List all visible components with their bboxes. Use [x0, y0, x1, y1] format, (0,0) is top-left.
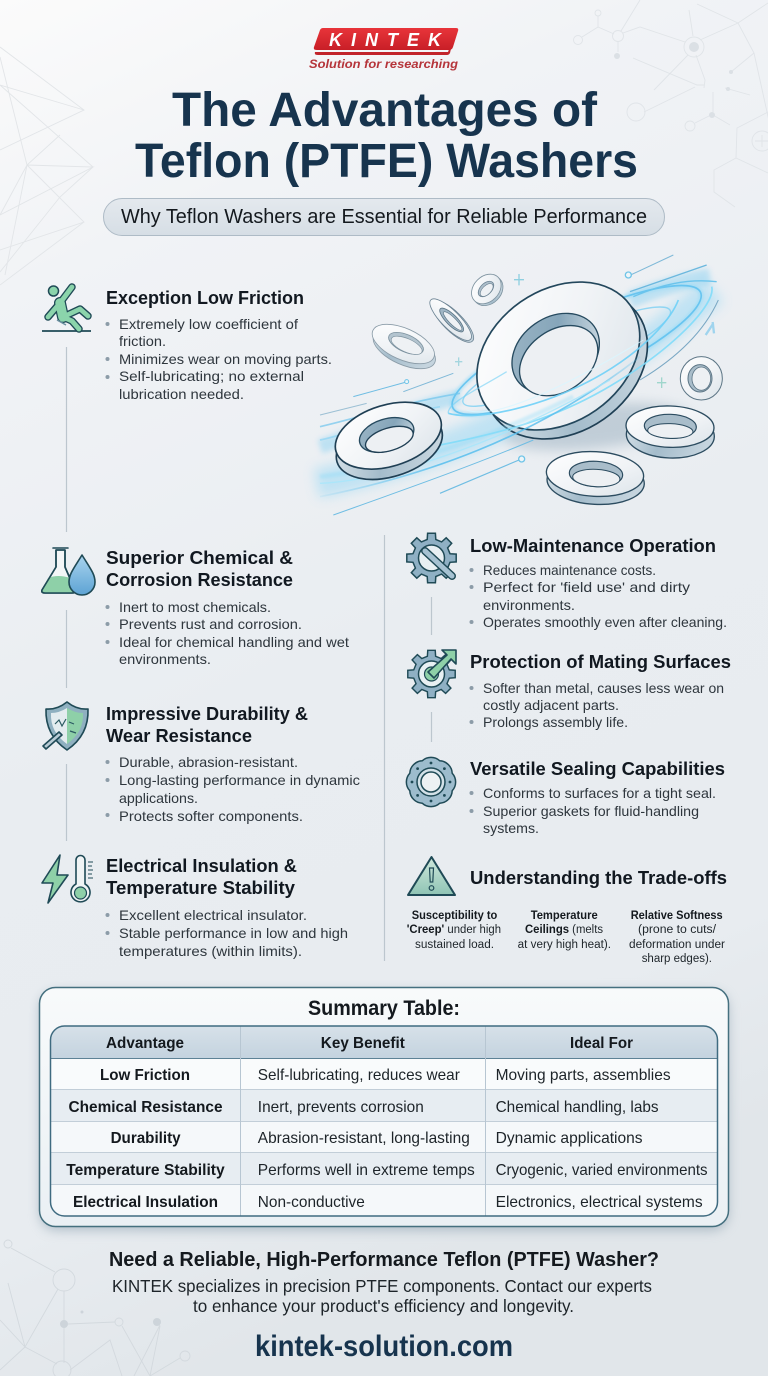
bullets: low friction: Extremely low coefficient of [119, 316, 298, 332]
bullets: low maintenance [470, 562, 727, 630]
table row: low friction: Moving parts, assemblies [496, 1067, 671, 1084]
heading: sealing: Versatile Sealing Capabilities [470, 759, 725, 779]
washer: narrow tilted [425, 294, 479, 348]
text: temperature ceilings: Ceilings (melts [525, 924, 603, 936]
background pattern: top right molecule network [574, 0, 768, 207]
heading: chemical resistance: Corrosion Resistance [106, 570, 293, 590]
heading: trade-offs: Understanding the Trade-offs [470, 868, 727, 888]
icon: gasket [406, 757, 456, 807]
washer: lower left [327, 390, 451, 491]
heading: low friction: Exception Low Friction [106, 288, 304, 308]
title: The Advantages of [172, 84, 598, 137]
bullets: low friction: friction. [119, 333, 166, 349]
table header row: Ideal For [570, 1035, 633, 1052]
table header row [106, 1035, 633, 1052]
panel: mating surfaces [408, 650, 731, 730]
text: relative softness: sharp edges). [642, 953, 712, 965]
panel: durability [43, 702, 360, 824]
icon: lightning and thermometer [42, 855, 93, 903]
bullets: sealing: Conforms to surfaces for a tight seal. [483, 785, 716, 801]
bullets: durability [106, 754, 360, 824]
bullets: chemical resistance: Inert to most chemicals. [119, 599, 271, 615]
table row: chemical resistance: Chemical Resistance [68, 1099, 223, 1116]
icon: slipping person [42, 286, 91, 331]
table row: electrical insulation [73, 1194, 703, 1211]
bullets: low maintenance: Perfect for 'field use' and dirty [483, 579, 690, 595]
bullets: durability: Protects softer components. [119, 808, 303, 824]
table header row: Advantage [106, 1035, 184, 1052]
table row: durability: Dynamic applications [496, 1130, 643, 1147]
text: creep: 'Creep' under high [407, 924, 501, 936]
panel: low friction [42, 286, 332, 402]
table row: temperature stability: Cryogenic, varied environments [496, 1162, 708, 1179]
washer: small right ring [680, 357, 722, 400]
table row: durability: Abrasion-resistant, long-lasting [258, 1130, 470, 1147]
icon: flask and drop [42, 548, 95, 595]
table row: low friction: Self-lubricating, reduces wear [258, 1067, 460, 1084]
bullets: durability: Durable, abrasion-resistant. [119, 754, 298, 770]
bullets: electrical and temperature: Excellent electrical insulator. [119, 907, 307, 923]
bullets: durability: applications. [119, 790, 198, 806]
heading: chemical resistance [106, 548, 293, 590]
bullets: low friction: Self-lubricating; no external [119, 368, 304, 384]
heading: durability: Impressive Durability & [106, 704, 308, 724]
title [135, 84, 638, 188]
logo: KINTEK: Solution for researching [309, 57, 459, 71]
panel: summary table card [40, 988, 728, 1230]
bullets: electrical and temperature: Stable performance in low and high [119, 925, 348, 941]
panel: low maintenance [407, 533, 727, 630]
table row: chemical resistance: Inert, prevents corrosion [258, 1099, 424, 1116]
text: relative softness: Relative Softness [631, 910, 723, 922]
text: relative softness [629, 910, 725, 965]
bullets: mating surfaces: Softer than metal, causes less wear on [483, 680, 724, 696]
table row: temperature stability: Temperature Stability [66, 1162, 225, 1179]
bullets: low maintenance: Reduces maintenance costs. [483, 562, 656, 578]
table row: electrical insulation: Electrical Insulation [73, 1194, 218, 1211]
heading: electrical and temperature: Temperature Stability [106, 878, 295, 898]
heading: electrical and temperature [106, 856, 297, 898]
text: temperature ceilings: Temperature [531, 910, 598, 922]
heading: durability: Wear Resistance [106, 726, 252, 746]
bullets: durability: Long-lasting performance in dynamic [119, 772, 360, 788]
heading: electrical and temperature: Electrical Insulation & [106, 856, 297, 876]
heading: mating surfaces: Protection of Mating Surfaces [470, 652, 731, 672]
bullets: low maintenance: Operates smoothly even after cleaning. [483, 614, 727, 630]
subtitle pill [104, 198, 664, 236]
panel: trade-offs [407, 857, 727, 965]
panel: sealing [406, 757, 725, 836]
heading: low maintenance: Low-Maintenance Operation [470, 536, 716, 556]
bullets: mating surfaces: costly adjacent parts. [483, 697, 619, 713]
washer: large centre [448, 251, 676, 470]
table row: durability: Durability [111, 1130, 181, 1147]
sparkles [455, 274, 666, 388]
center divider [384, 535, 386, 961]
ground shadow [502, 395, 692, 458]
title: Teflon (PTFE) Washers [135, 135, 638, 188]
washer: small top [466, 268, 509, 312]
bullets: sealing: Superior gaskets for fluid-handling [483, 803, 699, 819]
table row: temperature stability [66, 1162, 708, 1179]
bullets: electrical and temperature: temperatures (within limits). [119, 943, 302, 959]
table [50, 1026, 718, 1216]
table row: chemical resistance: Chemical handling, labs [496, 1099, 659, 1116]
bullets: mating surfaces: Prolongs assembly life. [483, 714, 628, 730]
heading: summary table: Summary Table: [308, 997, 460, 1020]
background pattern: bottom left network [0, 1240, 190, 1376]
bullets: mating surfaces [470, 680, 724, 730]
table header row: Key Benefit [321, 1035, 405, 1052]
bullets: chemical resistance: Prevents rust and corrosion. [119, 616, 302, 632]
text: temperature ceilings [518, 910, 611, 951]
washer: bottom centre [545, 449, 645, 507]
panel: electrical and temperature [42, 855, 348, 959]
logo: KINTEK [309, 28, 459, 71]
table row: chemical resistance [68, 1099, 659, 1116]
bullets: low friction: Minimizes wear on moving parts. [119, 351, 332, 367]
text: relative softness: deformation under [629, 939, 725, 951]
bullets: low friction: lubrication needed. [119, 386, 244, 402]
call to action [109, 1249, 659, 1316]
icon: gear and arrow [408, 650, 456, 698]
bullets: chemical resistance: Ideal for chemical handling and wet [119, 634, 349, 650]
logo: KINTEK: KINTEK [329, 30, 443, 50]
call to action: to enhance your product's efficiency and longevity. [193, 1296, 574, 1316]
bullets: low friction [106, 316, 332, 402]
text: creep [407, 910, 501, 951]
text: relative softness: (prone to cuts/ [638, 924, 717, 936]
background pattern: left polygon lines [0, 47, 93, 285]
table row: electrical insulation: Electronics, electrical systems [496, 1194, 703, 1211]
hero illustration: washers and blue streams [317, 251, 722, 515]
text: temperature ceilings: at very high heat). [518, 939, 611, 951]
bullets: sealing: systems. [483, 820, 539, 836]
bullets: chemical resistance [106, 599, 349, 667]
bullets: sealing [470, 785, 716, 836]
stream glow behind [317, 255, 718, 483]
icon: shield [43, 702, 88, 750]
washer: upper left [367, 316, 441, 377]
panel: chemical resistance [42, 548, 349, 667]
call to action: KINTEK specializes in precision PTFE components. Contact our experts [112, 1276, 652, 1296]
washer: right flat [625, 404, 715, 460]
text: creep: Susceptibility to [412, 910, 497, 922]
table row: low friction: Low Friction [100, 1067, 190, 1084]
stream lines in front [320, 272, 714, 515]
subtitle pill: Why Teflon Washers are Essential for Reliable Performance [121, 206, 647, 228]
table row: temperature stability: Performs well in extreme temps [258, 1162, 475, 1179]
icon: gear and wrench [407, 533, 456, 583]
heading: durability [106, 704, 308, 746]
table row: electrical insulation: Non-conductive [258, 1194, 365, 1211]
text: creep: sustained load. [415, 939, 494, 951]
bullets: low maintenance: environments. [483, 597, 575, 613]
bullets: chemical resistance: environments. [119, 651, 211, 667]
table row: durability [111, 1130, 643, 1147]
bullets: electrical and temperature [106, 907, 348, 959]
heading: chemical resistance: Superior Chemical & [106, 548, 293, 568]
call to action: Need a Reliable, High-Performance Teflon (PTFE) Washer? [109, 1249, 659, 1271]
website url: kintek-solution.com [255, 1330, 513, 1363]
table row: low friction [100, 1067, 671, 1084]
icon: warning triangle [408, 857, 455, 895]
